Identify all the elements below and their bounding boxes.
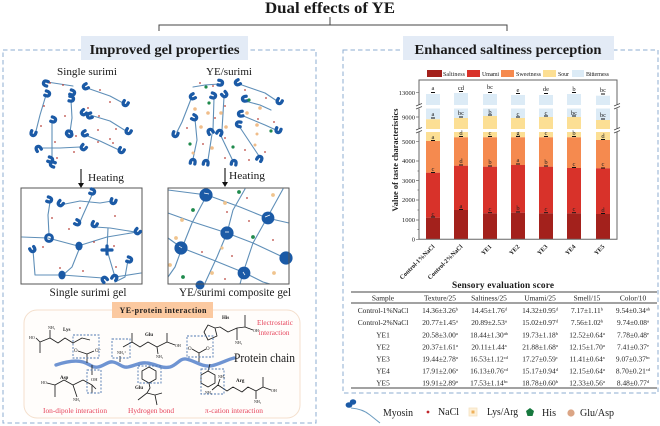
- structure: Arg: OH: [271, 388, 277, 393]
- diagram: single surimi myosin: [30, 80, 131, 167]
- x axis labels: YE4: [564, 243, 578, 257]
- structure: Lys: [29, 325, 102, 363]
- row YE2: 20.37±1.61: [422, 342, 456, 352]
- row YE2: a: [556, 343, 558, 348]
- significance letters: b: [572, 86, 576, 93]
- significance letters: b: [516, 205, 520, 212]
- row YE5: 18.78±0.60: [522, 378, 556, 388]
- table header: Color/10: [620, 294, 646, 302]
- structure: Lys: HO: [29, 335, 35, 340]
- row Control-1%NaCl: 7.17±1.11: [571, 306, 601, 315]
- row Control-2%NaCl: b: [601, 318, 604, 324]
- structure: His: O: [188, 347, 192, 352]
- significance letters: c: [517, 111, 520, 118]
- stacked bar chart: taste characteristics: [391, 80, 620, 281]
- structure: Arg: NH₂: [254, 399, 262, 404]
- significance letters: c: [545, 130, 548, 137]
- row YE5: 12.33±0.56: [569, 378, 603, 388]
- structure: Lys: O: [74, 349, 78, 354]
- row Control-1%NaCl: 9.54±0.34: [616, 306, 646, 315]
- row Control-2%NaCl: 15.02±0.97: [522, 318, 556, 327]
- error bars: [431, 92, 605, 217]
- icon: myosin: [346, 399, 380, 423]
- row YE5: 17.53±1.14: [470, 378, 504, 388]
- row YE2: a: [505, 343, 507, 348]
- y axis labels: 2000: [402, 197, 415, 204]
- row YE4: cd: [504, 367, 509, 372]
- row YE2: YE2: [376, 342, 390, 352]
- table header: [372, 294, 646, 302]
- row YE4: d: [556, 367, 559, 372]
- x axis labels: YE5: [593, 243, 606, 257]
- significance letters: a: [432, 85, 435, 92]
- label: single surimi: Single surimi: [57, 66, 117, 78]
- table header: Texture/25: [424, 294, 456, 302]
- row YE5: YE5: [376, 378, 390, 388]
- significance letters: b: [572, 130, 576, 137]
- bar Control-1%NaCl: [426, 94, 440, 239]
- row YE3: [376, 354, 650, 364]
- bar YE2: [511, 95, 525, 239]
- arrow: heating single: Heating: [88, 173, 125, 184]
- structure: Asp: [41, 365, 101, 402]
- row YE2: 21.88±1.68: [522, 342, 556, 352]
- significance letters: bc: [600, 112, 606, 119]
- row Control-1%NaCl: 14.32±0.95: [522, 306, 556, 315]
- legend: components: Myosin: [383, 407, 413, 419]
- row Control-2%NaCl: a: [647, 318, 649, 324]
- significance letters: e: [517, 87, 520, 94]
- significance letters: [432, 84, 606, 218]
- structure: Asp: HO: [41, 380, 47, 385]
- label: electrostatic interaction: [257, 319, 293, 337]
- heading: enhanced saltiness perception: [403, 36, 614, 60]
- row YE3: YE3: [376, 354, 390, 364]
- significance letters: bc: [458, 110, 464, 117]
- significance letters: d: [459, 130, 463, 137]
- diagram: YE/surimi myosin: [172, 80, 282, 165]
- y axis labels: 1000: [402, 217, 415, 224]
- label: composite gel: YE/surimi composite gel: [179, 287, 291, 299]
- row Control-1%NaCl: Control-1%NaCl: [358, 306, 408, 315]
- row YE3: cd: [504, 355, 509, 360]
- structure: His: O⁻: [206, 347, 213, 352]
- axis break marks: [416, 104, 620, 133]
- significance letters: a: [517, 157, 520, 164]
- row YE3: a: [456, 355, 458, 360]
- row Control-1%NaCl: d: [505, 306, 508, 312]
- significance letters: c: [545, 110, 548, 117]
- row YE5: [376, 378, 650, 388]
- significance letters: c: [432, 166, 435, 173]
- row Control-2%NaCl: a: [505, 318, 507, 324]
- label: electrostatic interaction: interaction: [258, 329, 290, 337]
- row Control-2%NaCl: Control-2%NaCl: [358, 318, 408, 327]
- structure: His: His: [222, 316, 229, 321]
- bar Control-2%NaCl: [454, 93, 468, 239]
- row YE2: 7.41±0.37: [617, 342, 647, 352]
- structure: Lys: O⁻: [95, 349, 102, 354]
- row YE4: a: [603, 367, 605, 372]
- icon: His: [526, 408, 534, 416]
- y axis title: Value of taste characteristics: [391, 108, 400, 212]
- panel: improved gel properties: [3, 36, 316, 423]
- label: protein chain: Protein chain: [234, 351, 296, 365]
- diagram: composite gel: [167, 188, 293, 290]
- row YE4: 12.15±0.64: [569, 366, 603, 376]
- row YE1: YE1: [376, 330, 390, 340]
- row YE3: 16.53±1.12: [470, 354, 504, 364]
- structure: Arg: Arg: [236, 379, 245, 384]
- row YE1: e: [647, 331, 649, 336]
- y axis labels: [399, 90, 415, 244]
- legend: components: His: [542, 407, 556, 419]
- composite gel frame: [168, 188, 289, 284]
- panel: YE-protein interaction: [24, 302, 300, 418]
- table header: Sample: [372, 294, 395, 302]
- significance letters: c: [602, 161, 605, 168]
- label: electrostatic interaction: Electrostatic: [257, 319, 293, 327]
- row YE3: bc: [646, 355, 650, 360]
- chart legend: Sweetness: [516, 72, 542, 78]
- label: pi-cation interaction: π-cation interaction: [205, 407, 264, 415]
- significance letters: c: [489, 130, 492, 137]
- heading: YE-protein interaction: YE-protein interaction: [120, 306, 207, 315]
- row YE1: 19.73±1.18: [522, 330, 556, 340]
- row Control-2%NaCl: 20.89±2.53: [471, 318, 505, 327]
- x axis labels: YE1: [480, 243, 493, 257]
- bar YE3: [539, 95, 553, 239]
- row Control-2%NaCl: a: [456, 318, 458, 324]
- row YE3: 11.41±0.64: [569, 354, 603, 364]
- significance letters: b: [544, 159, 548, 166]
- heading: YE-protein interaction: [112, 302, 213, 318]
- row YE5: 19.91±2.89: [422, 378, 456, 388]
- row YE1: [376, 330, 649, 340]
- row YE4: YE4: [376, 366, 390, 376]
- row Control-2%NaCl: 9.74±0.08: [617, 318, 647, 327]
- chart legend: Saltiness: [443, 72, 466, 78]
- row YE3: a: [603, 355, 605, 360]
- legend: components: Lys/Arg: [487, 406, 518, 418]
- significance letters: c: [432, 211, 435, 218]
- structure: His: [187, 315, 259, 362]
- table header: Saltiness/25: [471, 294, 507, 302]
- row YE2: 12.15±1.70: [569, 342, 603, 352]
- y axis labels: 3000: [402, 178, 415, 185]
- row YE5: 8.48±0.77: [617, 378, 647, 388]
- row YE2: [376, 342, 649, 352]
- row Control-1%NaCl: b: [601, 306, 604, 312]
- x axis labels: [399, 243, 606, 281]
- row YE1: 20.58±3.00: [422, 330, 456, 340]
- significance letters: a: [460, 203, 463, 210]
- label: YE/surimi: YE/surimi: [206, 66, 252, 78]
- significance letters: cd: [458, 85, 465, 92]
- structure: His: NH₂: [235, 340, 243, 345]
- bar YE4: [567, 94, 581, 239]
- y axis labels: 13000: [399, 90, 415, 97]
- table header: Umami/25: [524, 294, 556, 302]
- significance letters: c: [573, 161, 576, 168]
- y axis labels: 0: [412, 236, 415, 244]
- row YE1: a: [456, 331, 458, 336]
- row YE1: ab: [504, 331, 509, 336]
- heading: improved gel properties: [81, 36, 248, 60]
- chart legend: [427, 70, 610, 78]
- row YE1: 18.44±1.30: [470, 330, 504, 340]
- significance letters: a: [432, 111, 435, 118]
- structure: Arg: [201, 364, 277, 404]
- row YE3: 19.44±2.78: [422, 354, 456, 364]
- legend: components: Glu/Asp: [580, 407, 614, 419]
- y axis labels: 9000: [402, 114, 415, 122]
- label: ion-dipole interaction: Ion-dipole interaction: [43, 407, 108, 415]
- chart legend: Umami: [482, 72, 499, 78]
- y axis labels: 4000: [402, 158, 415, 165]
- structure: Glu bottom: [135, 366, 162, 405]
- legend: components: NaCl: [438, 406, 459, 418]
- row YE5: b: [556, 379, 559, 384]
- label: single surimi gel: Single surimi gel: [50, 287, 126, 299]
- icon: NaCl: [427, 411, 429, 413]
- significance letters: d: [601, 133, 605, 140]
- structure: Arg: NH₂: [205, 390, 213, 395]
- row YE2: a: [456, 343, 458, 348]
- table heading: Sensory evaluation score: [452, 281, 554, 291]
- heading: enhanced saltiness perception: Enhanced saltiness perception: [414, 43, 602, 58]
- significance letters: c: [545, 206, 548, 213]
- structure: Glu bottom: Glu: [135, 386, 143, 391]
- row YE1: b: [556, 331, 559, 336]
- row Control-1%NaCl: ab: [646, 306, 651, 312]
- label: hydrogen bond: Hydrogen bond: [128, 407, 175, 415]
- axes frame: [419, 80, 617, 239]
- axis break bands: [420, 105, 616, 132]
- row YE3: 17.27±0.59: [522, 354, 556, 364]
- y axis ticks: [416, 93, 419, 239]
- panel: enhanced saltiness perception: [343, 36, 658, 393]
- row YE2: a: [603, 343, 605, 348]
- row Control-2%NaCl: 7.56±1.02: [571, 318, 601, 327]
- structure: Glu top: [112, 333, 181, 362]
- row YE5: a: [456, 379, 458, 384]
- structure: Asp: NH₂: [73, 397, 81, 402]
- row YE2: 20.11±1.44: [471, 342, 505, 352]
- structure: Glu top: OH: [175, 343, 181, 348]
- significance letters: b: [488, 109, 492, 116]
- row Control-1%NaCl: b: [456, 306, 459, 312]
- structure: Lys: Lys: [63, 328, 71, 333]
- bar YE1: [483, 94, 497, 239]
- icon: Glu/Asp: [567, 409, 575, 417]
- diagram: single surimi gel: [21, 188, 142, 284]
- structure: Glu top: NH₃⁺: [117, 350, 126, 355]
- arrow: heating composite: [222, 168, 266, 187]
- chart legend: Sour: [558, 72, 569, 78]
- row YE4: 8.70±0.21: [616, 366, 646, 376]
- significance letters: bc: [571, 110, 577, 117]
- row Control-2%NaCl: [358, 318, 649, 327]
- cluster heads: [46, 235, 112, 279]
- bar YE5: [596, 96, 610, 239]
- structure: Lys: NH₂: [48, 325, 56, 330]
- row YE5: d: [647, 379, 650, 384]
- structure: Arg: NH₂: [218, 374, 226, 379]
- bracket connector: [159, 17, 507, 31]
- row Control-1%NaCl: d: [556, 306, 559, 312]
- significance letters: bc: [600, 87, 606, 94]
- arrow: heating single: [78, 169, 125, 188]
- significance letters: d: [601, 207, 605, 214]
- row Control-2%NaCl: 20.77±1.45: [422, 318, 456, 327]
- significance letters: c: [489, 206, 492, 213]
- row YE4: cd: [646, 367, 651, 372]
- structure: Asp: OH: [91, 377, 98, 382]
- x axis labels: YE3: [536, 243, 549, 257]
- significance letters: g: [516, 130, 520, 137]
- table header: Smell/15: [574, 294, 601, 302]
- table: sensory evaluation scores: [351, 292, 657, 388]
- legend: components: [346, 399, 614, 423]
- row Control-1%NaCl: 14.45±1.76: [471, 306, 505, 315]
- row YE4: 16.13±0.76: [470, 366, 504, 376]
- row Control-1%NaCl: [358, 306, 651, 315]
- significance letters: a: [432, 134, 435, 141]
- row YE5: a: [603, 379, 605, 384]
- significance letters: d: [459, 158, 463, 165]
- row YE3: c: [556, 355, 558, 360]
- row YE4: 15.17±0.94: [522, 366, 556, 376]
- y axis labels: 5000: [402, 139, 415, 146]
- significance letters: c: [573, 206, 576, 213]
- structure: His: OH: [253, 328, 259, 333]
- row YE1: 12.52±0.64: [569, 330, 603, 340]
- x axis labels: YE2: [508, 243, 521, 257]
- row YE1: a: [603, 331, 605, 336]
- arrow: heating composite: Heating: [229, 171, 266, 182]
- row YE2: e: [647, 343, 649, 348]
- heading: improved gel properties: Improved gel properties: [90, 42, 240, 57]
- x axis labels: Control-2%NaCl: [427, 243, 465, 281]
- row Control-1%NaCl: 14.36±3.26: [422, 306, 456, 315]
- row Control-2%NaCl: d: [556, 318, 559, 324]
- icon: Lys/Arg: [469, 408, 477, 416]
- x axis labels: Control-1%NaCl: [399, 243, 437, 281]
- structure: Glu top: NH₂: [156, 354, 164, 359]
- row YE4: 17.91±2.06: [422, 366, 456, 376]
- significance letters: b: [488, 159, 492, 166]
- structure: Glu top: Glu: [145, 333, 153, 338]
- protein chain curve: [56, 358, 234, 367]
- chart legend: Bitterness: [586, 72, 610, 78]
- row YE3: 9.07±0.37: [616, 354, 646, 364]
- row YE1: 7.78±0.48: [617, 330, 647, 340]
- row YE4: a: [456, 367, 458, 372]
- row YE4: [376, 366, 651, 376]
- significance letters: de: [543, 86, 549, 93]
- row YE5: bc: [504, 379, 508, 384]
- significance letters: bc: [487, 84, 493, 91]
- structure: Asp: Asp: [60, 376, 69, 381]
- title: Dual effects of YE: [265, 0, 395, 17]
